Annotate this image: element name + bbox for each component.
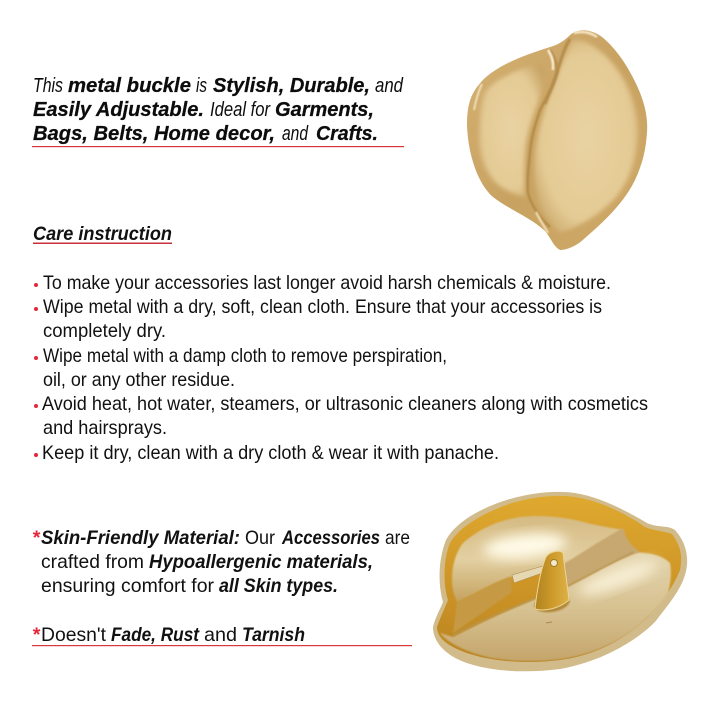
care instruction list: Keep it dry, clean with a dry cloth & wear it with panache. bbox=[42, 442, 499, 464]
fade and rust note: and bbox=[204, 624, 237, 646]
fade and rust note: Doesn't bbox=[41, 624, 107, 646]
skin-friendly material text block: all Skin types. bbox=[219, 575, 338, 597]
care instruction list: completely dry. bbox=[43, 320, 166, 342]
care instruction list: Avoid heat, hot water, steamers, or ultrasonic cleaners along with cosmetics bbox=[42, 393, 648, 415]
fade and rust note: * bbox=[32, 624, 41, 646]
care instruction list: Wipe metal with a damp cloth to remove perspiration, bbox=[43, 345, 447, 367]
intro text block: Bags, Belts, Home decor, bbox=[33, 123, 275, 145]
skin-friendly material text block: Skin-Friendly Material: bbox=[41, 527, 240, 549]
skin-friendly material text block bbox=[32, 527, 410, 597]
fade and rust note bbox=[32, 624, 412, 646]
care instruction list: and hairsprays. bbox=[43, 417, 167, 439]
intro text block: Crafts. bbox=[316, 123, 378, 145]
care instruction list: oil, or any other residue. bbox=[43, 369, 235, 391]
intro text block: and bbox=[375, 75, 404, 97]
care instruction list: Wipe metal with a dry, soft, clean cloth. Ensure that your accessories is bbox=[43, 296, 602, 318]
skin-friendly material text block: Our bbox=[245, 527, 275, 549]
care instruction list bbox=[34, 272, 648, 464]
skin-friendly material text block: crafted from bbox=[41, 551, 144, 573]
fade and rust note: Fade, Rust bbox=[111, 624, 200, 646]
skin-friendly material text block: Accessories bbox=[281, 527, 380, 549]
skin-friendly material text block: * bbox=[32, 527, 41, 549]
intro text block: Ideal for bbox=[210, 99, 271, 121]
skin-friendly material text block: ensuring comfort for bbox=[41, 575, 215, 597]
intro text block: is bbox=[196, 75, 207, 97]
intro text block: metal buckle bbox=[68, 75, 191, 97]
care instruction list: To make your accessories last longer avoid harsh chemicals & moisture. bbox=[43, 272, 611, 294]
intro text block: and bbox=[282, 123, 309, 145]
intro text block: Easily Adjustable. bbox=[33, 99, 204, 121]
heading: care instruction: Care instruction bbox=[33, 223, 172, 245]
intro text block: This bbox=[33, 75, 63, 97]
icon: gold buckle front view bbox=[467, 30, 647, 250]
skin-friendly material text block: are bbox=[385, 527, 410, 549]
fade and rust note: Tarnish bbox=[242, 624, 305, 646]
skin-friendly material text block: Hypoallergenic materials, bbox=[149, 551, 373, 573]
intro text block: Garments, bbox=[275, 99, 374, 121]
intro text block bbox=[32, 75, 404, 147]
icon: gold buckle back view bbox=[433, 492, 687, 671]
intro text block: Stylish, Durable, bbox=[213, 75, 370, 97]
